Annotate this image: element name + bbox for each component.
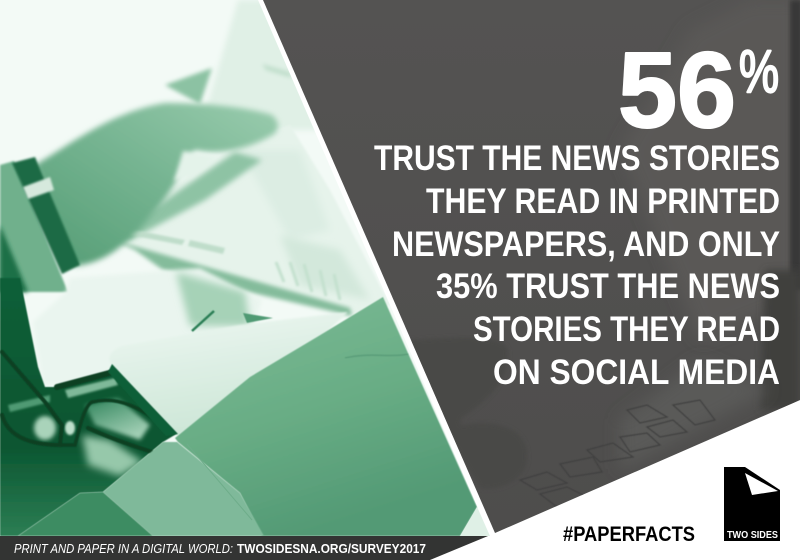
dark desk and arm xyxy=(0,278,178,536)
left sleeve and wristwatch xyxy=(0,157,80,292)
logo: Two Sides xyxy=(724,467,780,541)
dark jacket end xyxy=(18,492,153,536)
glasses frames xyxy=(2,352,172,452)
hand xyxy=(35,68,278,266)
pale desk behind the notebook xyxy=(33,268,262,385)
shirt cuff xyxy=(103,442,264,536)
statistic: 56%: % xyxy=(739,38,779,105)
footer source bar xyxy=(0,536,488,560)
hashtag: #PAPERFACTS xyxy=(563,523,695,546)
statistic: 56%: 56 xyxy=(618,29,736,150)
right-hand jacket sleeve xyxy=(175,297,490,536)
footer source bar: TWOSIDESNA.ORG/SURVEY2017 xyxy=(237,542,426,556)
main statement text: ON SOCIAL MEDIA xyxy=(493,353,780,392)
blurred hand silhouette xyxy=(410,338,495,473)
footer source bar: PRINT AND PAPER IN A DIGITAL WORLD: xyxy=(14,542,233,556)
faint light and shadow shapes in the panel background xyxy=(638,129,788,328)
newspaper xyxy=(113,125,390,316)
glasses lens reflections xyxy=(8,378,150,476)
notebook xyxy=(110,312,348,436)
dark text panel xyxy=(263,0,800,533)
main statement text xyxy=(374,139,780,392)
photo: hands holding a newspaper, green duotone xyxy=(0,0,500,540)
logo: Two Sides: TWO SIDES xyxy=(727,529,778,541)
upper sheet of paper xyxy=(206,0,320,130)
keyboard keys xyxy=(520,400,715,507)
